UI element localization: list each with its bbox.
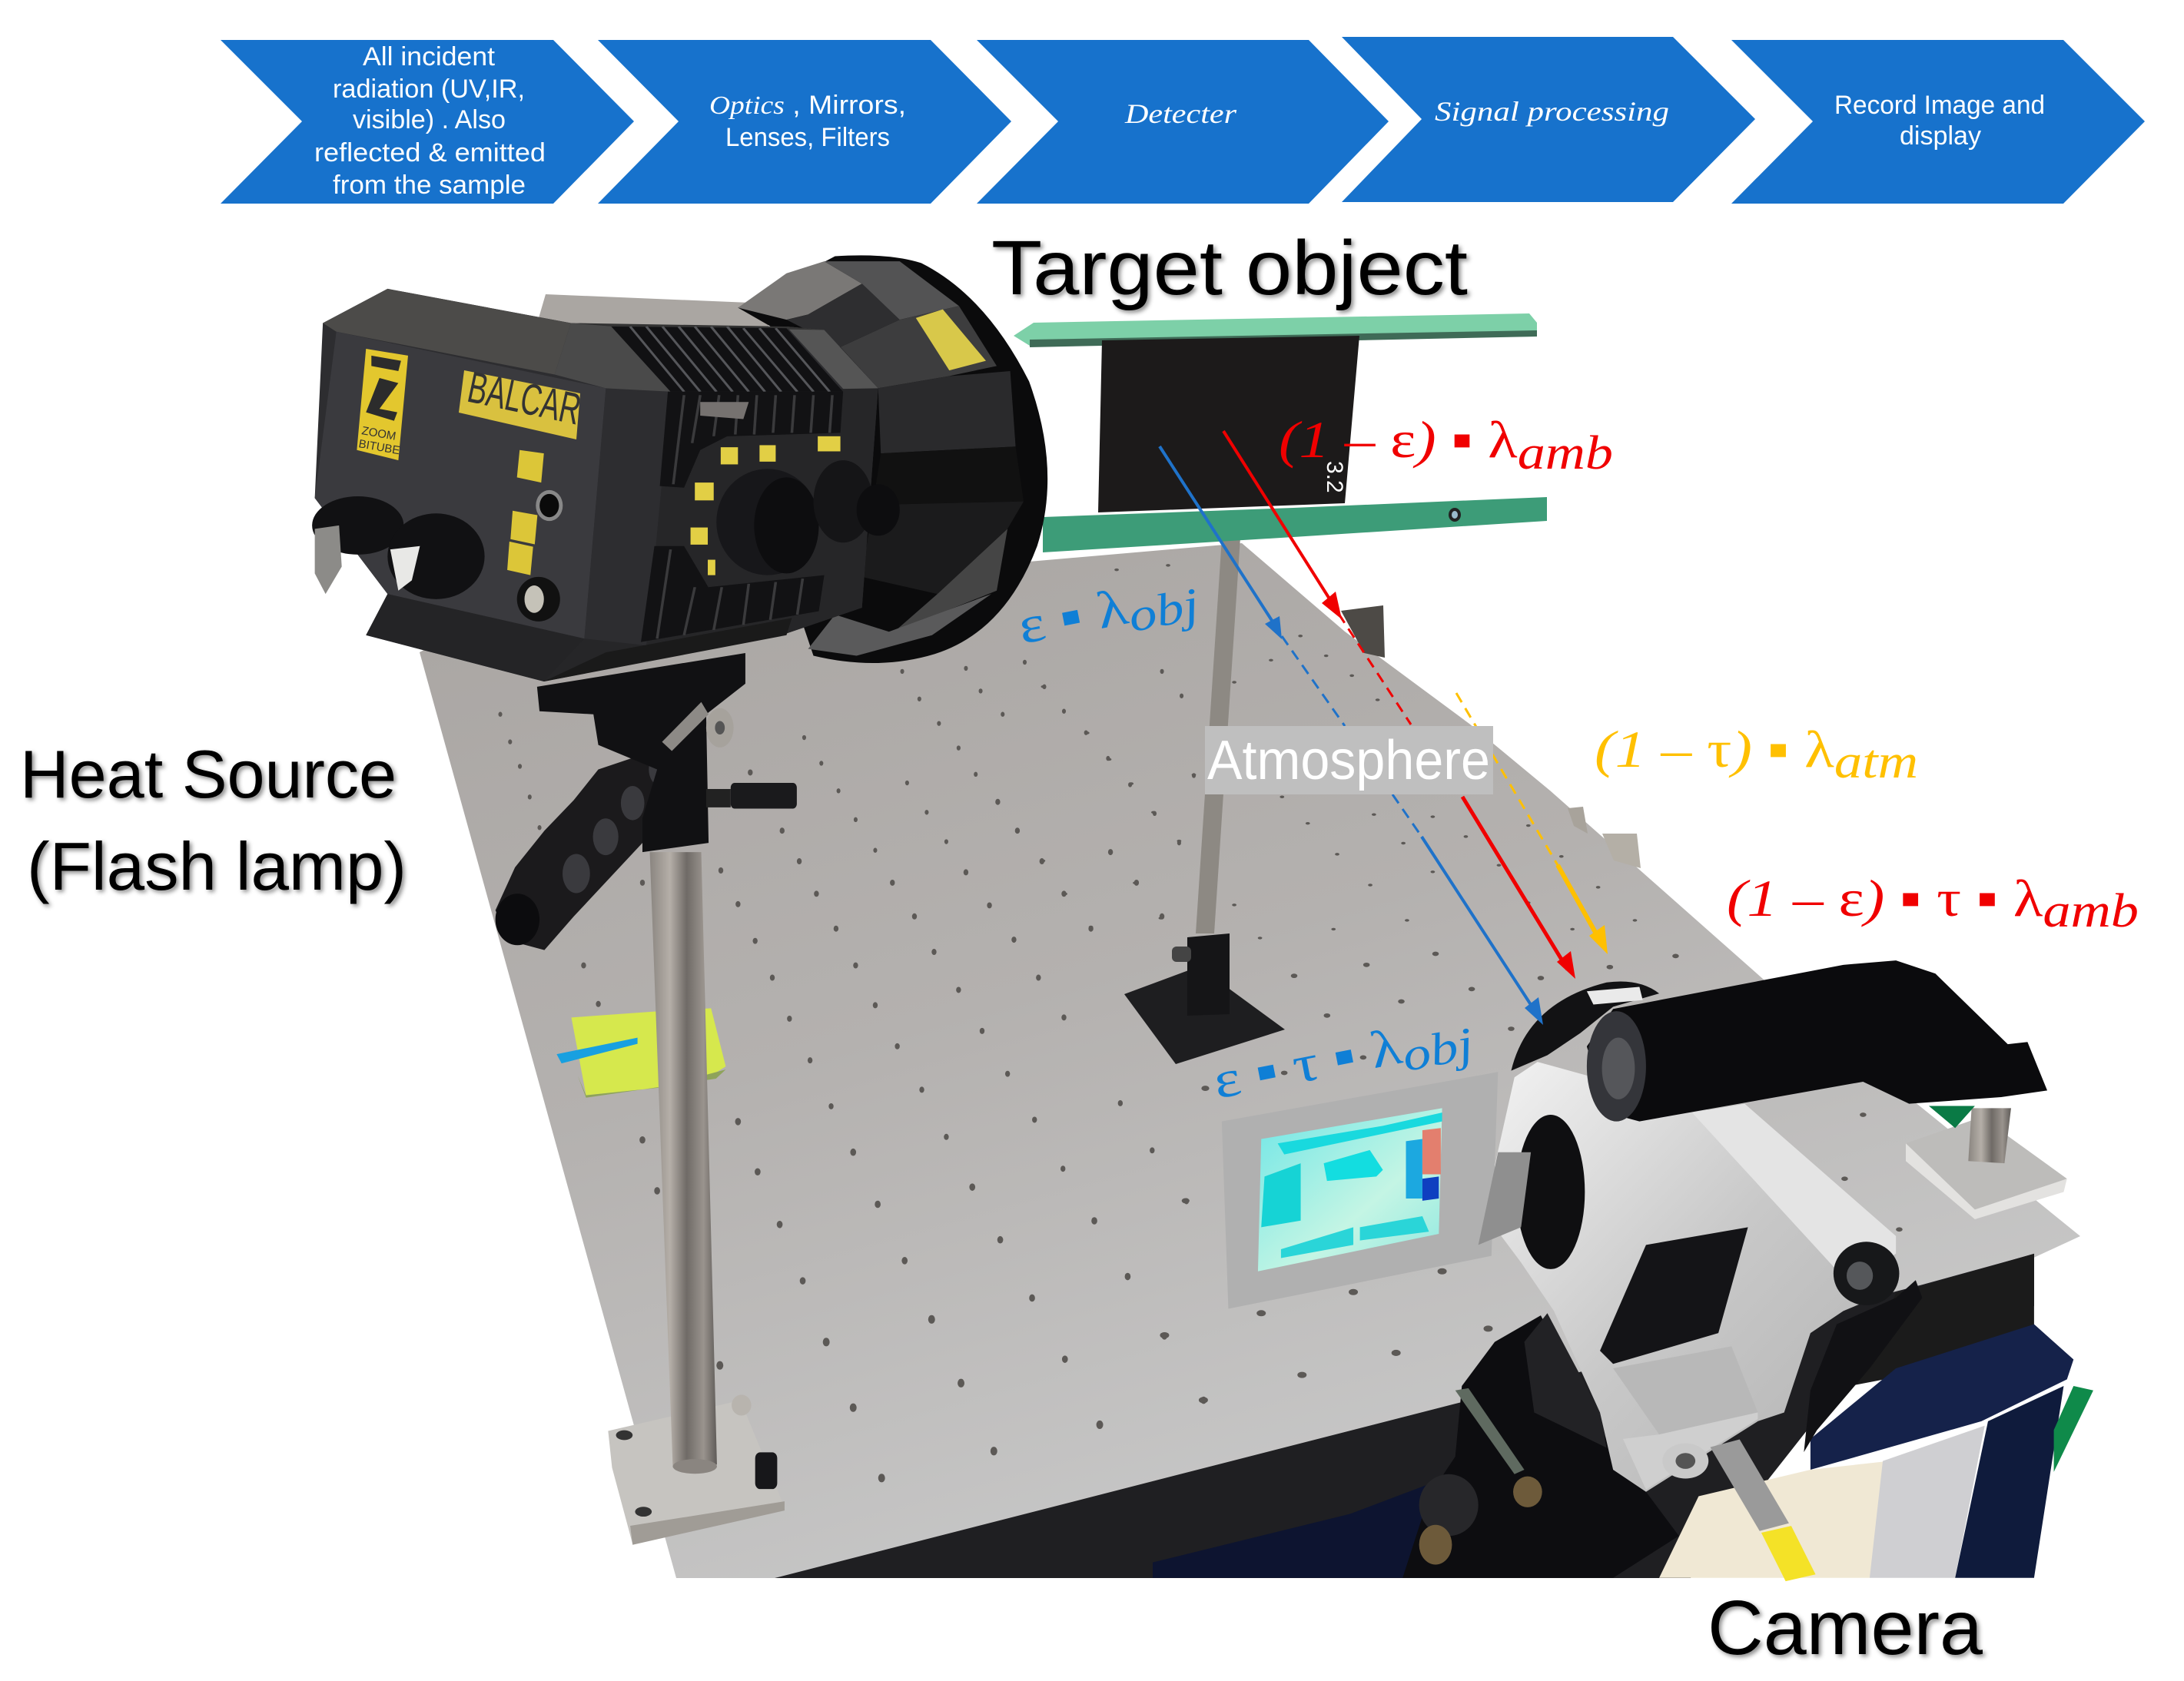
right wiring [1804,1280,1922,1452]
table holes [498,564,1903,1482]
base plate [608,1401,785,1544]
target object on stand [1014,313,1547,1064]
formula: reflected transmitted: (1 – ε) ▪ τ ▪ λ [1727,869,2039,927]
tripod head [1402,1315,1679,1578]
lamp front face [315,332,606,638]
chevron: record image: Record Image and [1834,91,2045,120]
camera black panel [1600,1227,1748,1364]
heading: heat source: Heat Source [20,736,397,812]
chevron: signal processing [1342,37,1755,202]
zoom badge text: ZOOM [360,424,397,443]
buttons [536,490,563,521]
steel pole [650,852,717,1467]
formula: emitted: obj [1124,579,1203,642]
locking pin [706,789,731,807]
lamp side body [544,388,878,681]
chevron: record image: display [1900,121,1981,151]
formula: reflected transmitted: amb [2043,885,2139,937]
lamp side chamfers [555,323,671,392]
chevron: detector: Detecter [1124,98,1237,129]
formula: reflected: amb [1518,427,1613,479]
formula: emitted: ε ▪ λ [1013,578,1127,655]
zoom badge text [357,424,401,457]
target object on stand: 3.2 [1322,461,1347,493]
chevron: optics: Lenses, Filters [725,123,890,152]
lamp body base [315,289,878,681]
stand base [1124,966,1285,1064]
reflector facets [738,261,862,320]
right lens [1834,1242,1899,1305]
tilt head [537,653,745,852]
arrow: blue object radiation [1160,446,1543,1025]
camera body [1495,1062,1896,1492]
chevron: incident radiation: visible) . Also [353,105,506,134]
atmosphere label: Atmosphere [1207,730,1490,791]
zoom badge text: BITUBE [357,437,401,457]
target lower green bar [1043,497,1547,552]
chevron: optics: Optics , Mirrors, [709,91,906,120]
top arm [1511,982,1659,1071]
reflector rim [738,255,1047,663]
lamp lower lip [366,594,603,681]
chevron: incident radiation [221,40,634,204]
formula: reflected: (1 – ε) ▪ λ [1279,410,1513,469]
chevron: signal processing: Signal processing [1435,96,1669,127]
heading: camera: Camera [1708,1585,1983,1671]
table side dark block [1850,1254,2034,1386]
base strip [544,618,792,681]
formula: emitted transmitted: obj [1398,1018,1478,1081]
big dial [716,469,819,575]
arrow: orange atmosphere radiation [1456,693,1608,954]
thermal camera [1153,960,2093,1578]
grip handle [496,748,682,950]
table underside [775,1254,2034,1578]
dial labels [691,436,841,575]
lamp top face [323,289,571,374]
chevron: incident radiation: reflected & emitted [314,138,546,167]
target black sample [1098,336,1359,512]
sticky note [556,1008,725,1098]
target stand post [1196,538,1240,933]
thermal screen [1258,1108,1442,1272]
side vents [660,392,843,488]
heat source flash lamp [312,255,1047,681]
formula: atmosphere: (1 – τ) ▪ λ [1595,720,1830,778]
heat source stand [496,653,797,1545]
chevron: incident radiation: All incident [363,42,496,71]
heading: heat source [20,736,407,904]
black recess [1516,1115,1585,1269]
display frame [1222,1072,1498,1309]
viewfinder tube [1587,960,2047,1122]
chevron: detector [977,40,1389,204]
formula: atmosphere: atm [1834,736,1918,788]
chevron: incident radiation: from the sample [333,171,526,200]
camera side panel [1692,1104,1896,1285]
connectors [1662,1444,1708,1479]
arrow: red reflected radiation [1223,431,1575,979]
target top green bar [1014,313,1537,346]
small dial [814,460,873,542]
cable [1725,1444,1801,1578]
viewfinder mount plate [1906,1117,2067,1218]
frame background [1659,1461,1890,1578]
navy frame [1811,1325,2073,1470]
process chevrons [221,37,2145,204]
front knobs [312,496,403,555]
chevron: incident radiation: radiation (UV,IR, [333,75,525,104]
heading: heat source: (Flash lamp) [27,828,407,904]
chevron: record image [1731,40,2145,204]
formula: emitted transmitted: ε ▪ τ ▪ λ [1208,1017,1401,1110]
heading: target object: Target object [991,225,1468,311]
top vents [611,327,843,392]
BALCAR label: BALCAR [463,363,585,435]
photo: optical table [420,294,2080,1578]
Z badge [357,349,408,460]
warning labels [507,450,544,575]
chevron: optics [598,40,1011,204]
